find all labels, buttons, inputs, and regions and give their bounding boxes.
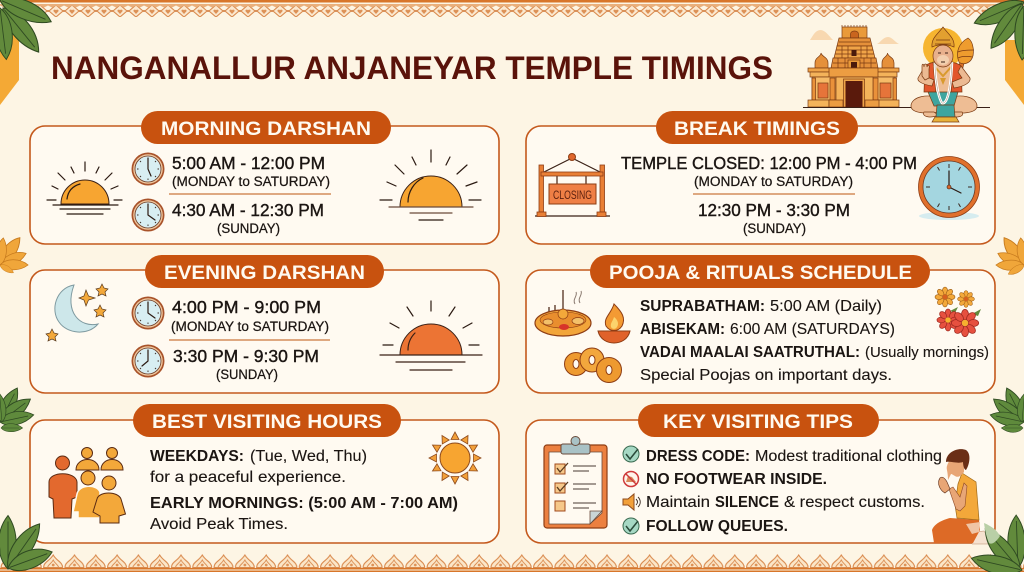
text: weekday evening hours: [171, 297, 329, 334]
icon: small sunrise: [47, 162, 122, 214]
icon: vadai: [564, 348, 622, 382]
text: sunday morning hours: (SUNDAY): [217, 221, 280, 236]
heading: pooja and rituals schedule: POOJA & RITUALS SCHEDULE: [609, 262, 912, 284]
text: sunday closed hours: (SUNDAY): [743, 221, 806, 236]
text: pooja schedule: Special Poojas on important days.: [640, 367, 892, 384]
heading: best visiting hours: [133, 404, 401, 437]
text: sunday closed hours: [698, 200, 850, 236]
icon: crescent moon and stars: [46, 284, 108, 341]
heading: break timings: BREAK TIMINGS: [674, 118, 840, 140]
text: best visiting details: (Tue, Wed, Thu): [250, 448, 367, 465]
icon: check dress code: [623, 446, 639, 462]
text: visiting tips: Modest traditional clothing: [755, 448, 942, 465]
icon: sun: [429, 432, 481, 484]
corner decoration: top right: [971, 0, 1024, 105]
text: best visiting details: Avoid Peak Times.: [150, 516, 288, 533]
icon: clock 5:00: [132, 152, 164, 186]
icon: checklist clipboard: [544, 436, 607, 528]
text: sunday evening hours: (SUNDAY): [216, 367, 278, 382]
icon: flowers: [935, 287, 981, 337]
icon: closing sign: CLOSING: [553, 190, 592, 202]
text: visiting tips: [646, 448, 942, 535]
text: pooja schedule: (Usually mornings): [865, 345, 989, 361]
icon: group of people: [49, 448, 126, 523]
text: pooja schedule: ABISEKAM:: [640, 321, 725, 338]
side decoration: left green leaves: [0, 385, 35, 432]
text: sunday evening hours: 3:30 PM - 9:30 PM: [173, 346, 319, 366]
panel: key visiting tips: [526, 404, 995, 544]
icon: large sunrise: [380, 150, 481, 220]
side decoration: right orange leaves: [996, 234, 1024, 277]
text: pooja schedule: 6:00 AM (SATURDAYS): [730, 321, 895, 338]
text: visiting tips: Maintain: [646, 494, 710, 511]
heading: break timings: [656, 111, 858, 144]
text: pooja schedule: 5:00 AM (Daily): [770, 298, 882, 315]
icon: clock 4:30: [132, 198, 164, 232]
icon: closing sign: [535, 154, 610, 216]
text: weekday evening hours: (MONDAY to SATURDAY): [171, 319, 329, 334]
text: best visiting details: EARLY MORNINGS: (5:00 AM - 7:00 AM): [150, 495, 458, 512]
icon: oil lamp: [598, 304, 630, 343]
text: weekday morning hours: (MONDAY to SATURDAY): [172, 174, 330, 189]
text: weekday morning hours: 5:00 AM - 12:00 PM: [172, 153, 325, 173]
text: weekday morning hours: [172, 153, 330, 189]
heading: key visiting tips: KEY VISITING TIPS: [663, 411, 853, 433]
text: visiting tips: DRESS CODE:: [646, 448, 750, 465]
text: sunday closed hours: 12:30 PM - 3:30 PM: [698, 200, 850, 220]
icon: wall clock: [918, 156, 980, 220]
side decoration: right green leaves: [989, 385, 1024, 432]
text: weekday evening hours: 4:00 PM - 9:00 PM: [172, 297, 321, 317]
corner decoration: bottom left leaves: [0, 516, 55, 572]
heading: morning darshan: MORNING DARSHAN: [161, 118, 371, 140]
text: sunday morning hours: [172, 200, 324, 236]
panel: morning darshan: [30, 111, 499, 244]
text: visiting tips: FOLLOW QUEUES.: [646, 518, 788, 535]
illustration: temple: [803, 25, 990, 108]
title: NANGANALLUR ANJANEYAR TEMPLE TIMINGS: [51, 50, 773, 86]
text: pooja schedule: [640, 298, 989, 384]
text: best visiting details: for a peaceful experience.: [150, 469, 346, 486]
text: pooja schedule: SUPRABATHAM:: [640, 298, 765, 315]
icon: clock 4:00: [132, 296, 164, 330]
text: weekday closed hours: (MONDAY to SATURDAY): [694, 174, 853, 189]
text: sunday evening hours: [173, 346, 319, 382]
text: best visiting details: WEEKDAYS:: [150, 448, 244, 465]
text: visiting tips: SILENCE: [715, 494, 779, 511]
text: sunday morning hours: 4:30 AM - 12:30 PM: [172, 200, 324, 220]
text: best visiting details: [150, 448, 458, 533]
top decorative border: [0, 0, 1024, 17]
heading: morning darshan: [141, 111, 391, 144]
heading: pooja and rituals schedule: [590, 255, 930, 288]
bottom decorative border: [0, 554, 1024, 572]
illustration: Hanuman: [911, 27, 977, 122]
heading: evening darshan: [145, 255, 384, 288]
text: weekday closed hours: [621, 153, 917, 189]
heading: best visiting hours: BEST VISITING HOURS: [152, 411, 382, 433]
corner decoration: top left: [0, 0, 55, 105]
panel: pooja and rituals schedule: [526, 255, 995, 393]
text: weekday closed hours: TEMPLE CLOSED: 12:00 PM - 4:00 PM: [621, 153, 917, 173]
icon: no footwear: [624, 472, 638, 486]
panel: best visiting hours: [30, 404, 499, 543]
panel: break timings: [526, 111, 995, 244]
icon: speaker: [623, 494, 640, 510]
icon: clock 3:30: [132, 344, 164, 378]
icon: devotee praying: [932, 449, 991, 544]
icon: check queues: [623, 518, 639, 534]
heading: evening darshan: EVENING DARSHAN: [164, 262, 365, 284]
panel: evening darshan: [30, 255, 499, 393]
icon: pooja thali: [535, 290, 591, 336]
side decoration: left orange leaves: [0, 234, 28, 275]
corner decoration: bottom right leaves: [969, 515, 1024, 572]
heading: key visiting tips: [638, 404, 879, 437]
text: pooja schedule: VADAI MAALAI SAATRUTHAL:: [640, 344, 860, 361]
text: visiting tips: NO FOOTWEAR INSIDE.: [646, 471, 827, 488]
text: visiting tips: & respect customs.: [784, 494, 925, 511]
icon: sunset: [380, 301, 482, 370]
